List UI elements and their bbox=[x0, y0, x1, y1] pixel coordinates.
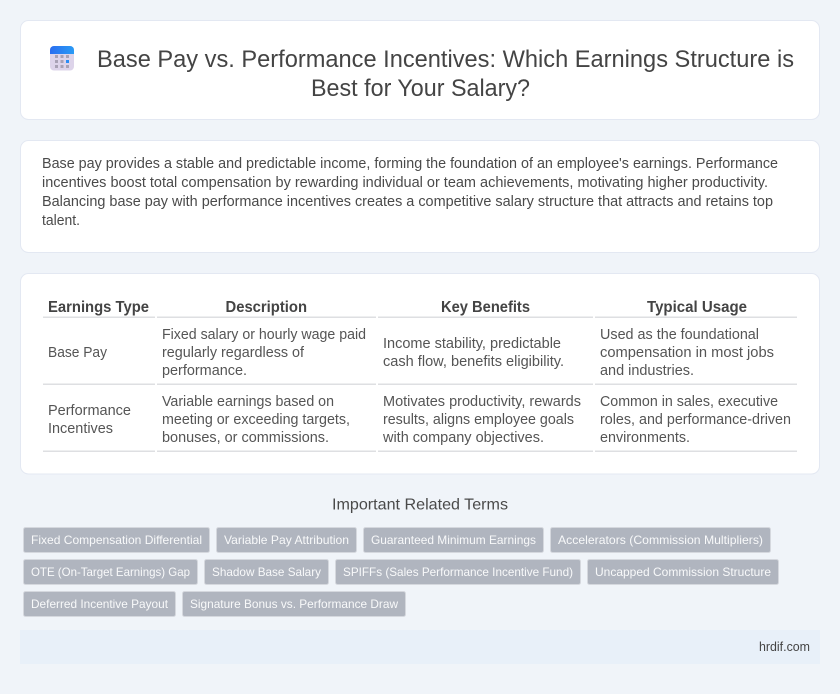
tag bbox=[24, 560, 198, 584]
table row: base pay: Base Pay bbox=[48, 345, 108, 361]
heading: related terms: Important Related Terms bbox=[332, 496, 508, 514]
text block: summary: incentives boost total compensation by rewarding individual or team achievements, motivating higher productivity. bbox=[42, 175, 768, 191]
heading: title: Base Pay vs. Performance Incentives: Which Earnings Structure is bbox=[97, 46, 794, 73]
text block: summary: Balancing base pay with performance incentives creates a competitive salary structure that attracts and retains top bbox=[42, 194, 773, 210]
table row: performance incentives: results, aligns employee goals bbox=[383, 412, 574, 428]
tag: Variable Pay Attribution bbox=[224, 533, 349, 547]
table row: performance incentives bbox=[43, 394, 797, 452]
table header row: Description bbox=[226, 299, 307, 316]
tag bbox=[364, 528, 544, 552]
table row: performance incentives: Incentives bbox=[48, 421, 113, 437]
panel: title header bbox=[20, 20, 820, 120]
tag: Fixed Compensation Differential bbox=[31, 533, 202, 547]
tag: Accelerators (Commission Multipliers) bbox=[558, 533, 763, 547]
tag: Signature Bonus vs. Performance Draw bbox=[190, 597, 398, 611]
table row: performance incentives: environments. bbox=[600, 430, 690, 446]
icon: calendar bbox=[50, 46, 74, 70]
tag: Guaranteed Minimum Earnings bbox=[371, 533, 536, 547]
panel: summary paragraph bbox=[20, 140, 820, 252]
table header row bbox=[43, 299, 797, 318]
table row: performance incentives: roles, and performance-driven bbox=[600, 412, 791, 428]
tag bbox=[204, 560, 328, 584]
table row: performance incentives: meeting or exceeding targets, bbox=[162, 412, 350, 428]
table row: base pay: Fixed salary or hourly wage paid bbox=[162, 327, 366, 343]
tag bbox=[550, 528, 770, 552]
tag: Uncapped Commission Structure bbox=[595, 565, 771, 579]
panel: comparison table bbox=[20, 274, 820, 474]
table row: base pay: compensation in most jobs bbox=[600, 345, 774, 361]
table row: base pay: regularly regardless of bbox=[162, 345, 305, 361]
tag: SPIFFs (Sales Performance Incentive Fund) bbox=[343, 565, 573, 579]
text block: summary: Base pay provides a stable and predictable income, forming the foundation of an employee's earnings. Performance bbox=[42, 156, 778, 172]
tag bbox=[24, 528, 210, 552]
table row: performance incentives: Motivates productivity, rewards bbox=[383, 394, 581, 410]
table row: base pay: performance. bbox=[162, 363, 247, 379]
tag bbox=[24, 592, 176, 616]
table row: base pay: Used as the foundational bbox=[600, 327, 759, 343]
tag bbox=[216, 528, 356, 552]
table row: performance incentives: bonuses, or commissions. bbox=[162, 430, 329, 446]
tag bbox=[336, 560, 580, 584]
footer source text: hrdif.com bbox=[759, 640, 810, 654]
tag list: related terms bbox=[24, 528, 778, 616]
table row: performance incentives: with company objectives. bbox=[382, 430, 544, 446]
table row: performance incentives: Performance bbox=[48, 403, 131, 419]
heading: title bbox=[97, 46, 794, 102]
table row: base pay: Income stability, predictable bbox=[383, 336, 561, 352]
table header row: Key Benefits bbox=[441, 299, 530, 316]
table row: base pay bbox=[43, 327, 797, 385]
tag bbox=[182, 592, 406, 616]
table row: performance incentives: Variable earnings based on bbox=[162, 394, 334, 410]
table row: base pay: cash flow, benefits eligibility. bbox=[383, 354, 564, 370]
text block: summary bbox=[42, 156, 778, 229]
table row: performance incentives: Common in sales, executive bbox=[600, 394, 778, 410]
tag bbox=[588, 560, 778, 584]
tag: Deferred Incentive Payout bbox=[31, 597, 169, 611]
table row: base pay: and industries. bbox=[600, 363, 694, 379]
tag: OTE (On-Target Earnings) Gap bbox=[31, 565, 190, 579]
text block: summary: talent. bbox=[42, 213, 80, 229]
table header row: Earnings Type bbox=[48, 299, 149, 316]
table header row: Typical Usage bbox=[647, 299, 747, 316]
tag: Shadow Base Salary bbox=[212, 565, 321, 579]
footer bar bbox=[20, 630, 820, 664]
heading: title: Best for Your Salary? bbox=[311, 75, 530, 102]
